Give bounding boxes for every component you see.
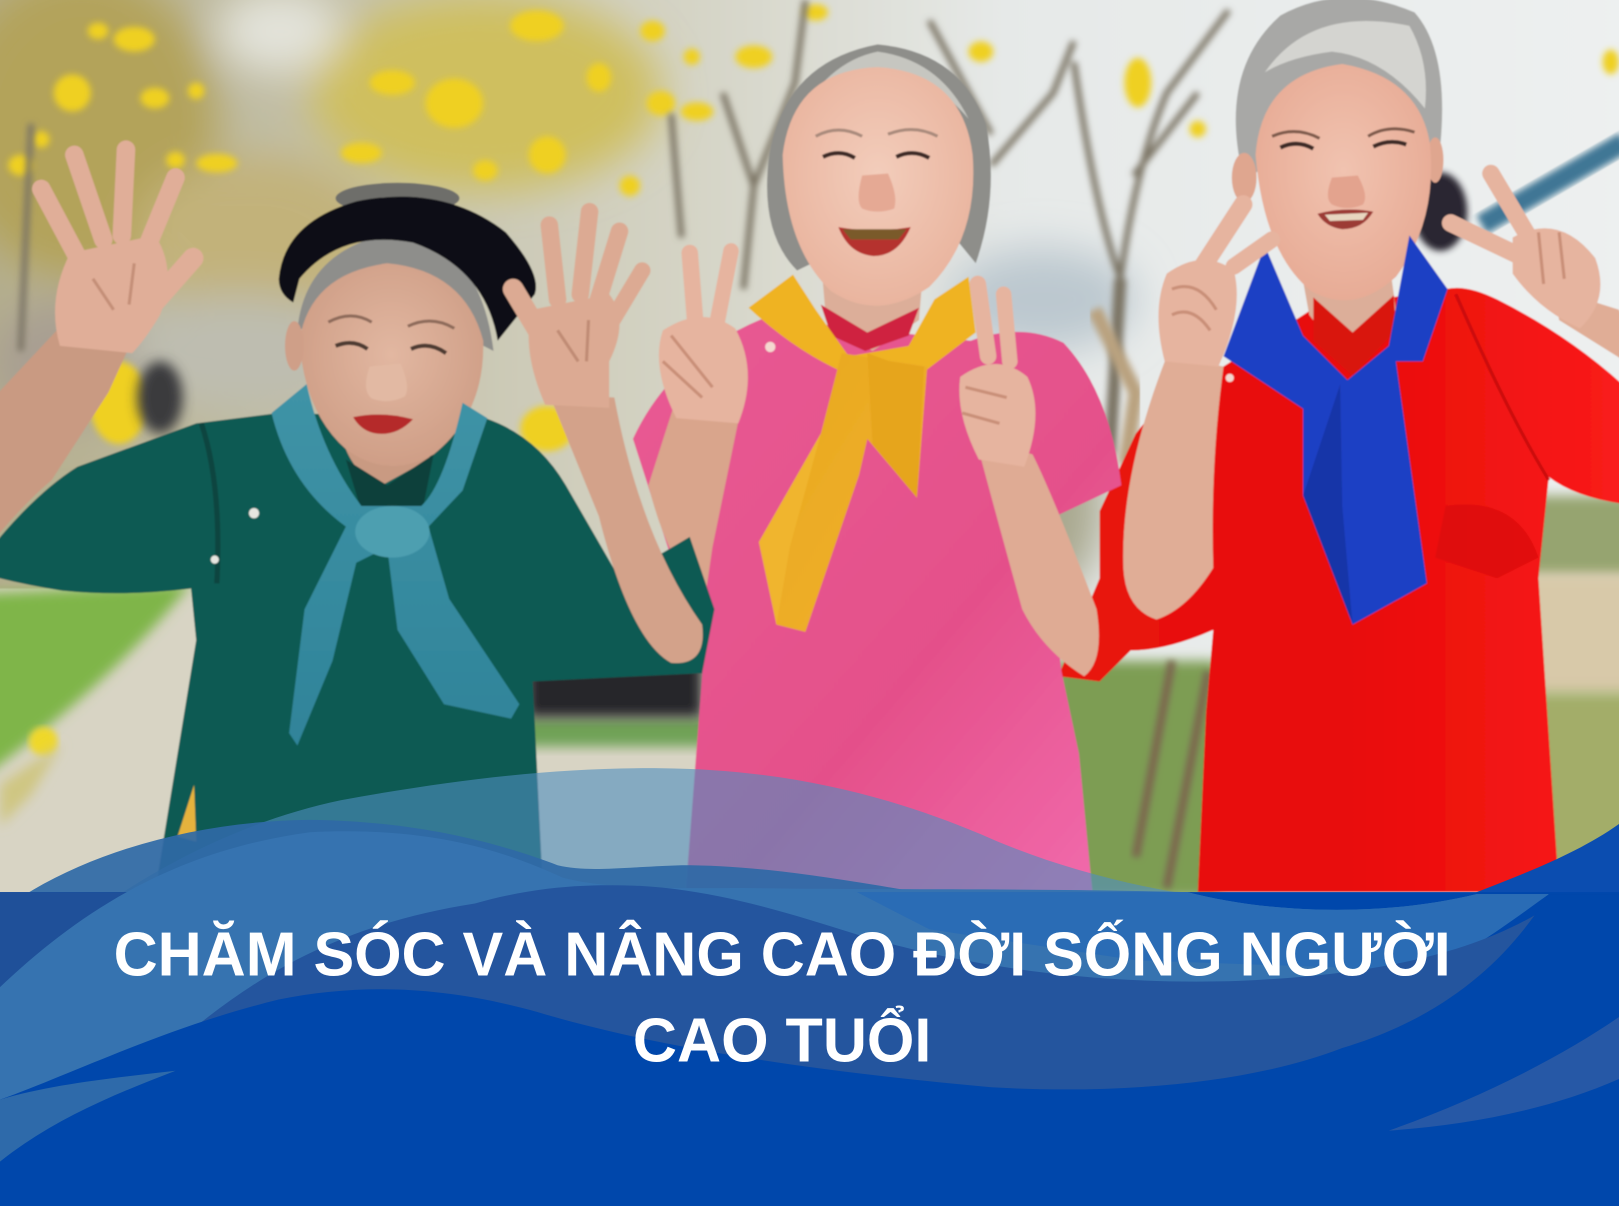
- left raised arm: [0, 330, 134, 558]
- left arm and V-sign hand: [648, 408, 738, 604]
- right arm and V-sign hand: [1554, 289, 1619, 372]
- neck and collar: [1299, 258, 1396, 372]
- blue scarf: [1224, 235, 1448, 625]
- banner: blue wave background: [0, 831, 1619, 1206]
- wave: medium crest over the photo: [26, 820, 929, 894]
- black hat: [279, 197, 536, 341]
- woman in green ao dai with teal scarf and black hat: [0, 150, 715, 892]
- woman in red ao dai with blue scarf: [1058, 0, 1619, 892]
- deep blue lower wave: [0, 894, 1619, 1206]
- light blue band: [0, 831, 1549, 1162]
- right raised hand: [513, 212, 642, 408]
- left arm and V-sign hand: [1123, 356, 1224, 620]
- photo background: flowering trees and park: [0, 0, 1619, 898]
- green dress: [0, 413, 715, 892]
- right lower wave sliver: [1389, 1017, 1619, 1131]
- dress buttons: [211, 508, 259, 564]
- silver hair: [1236, 0, 1442, 181]
- wave: translucent light crest over the photo: [0, 768, 1187, 991]
- wave: deep blue crest top right over the photo: [1471, 824, 1619, 894]
- left raised hand: [41, 150, 193, 353]
- woman in pink ao dai with yellow scarf: [633, 44, 1121, 892]
- ears: [1232, 137, 1443, 202]
- red dress: [1058, 288, 1619, 892]
- face: [1256, 64, 1431, 300]
- photo: three elderly women in ao dai waving: [0, 0, 1619, 898]
- left lower wave sliver: [0, 1071, 176, 1162]
- yellow scarf: [749, 275, 976, 374]
- pink dress: [633, 318, 1121, 892]
- neck: [341, 434, 439, 485]
- face: [783, 67, 973, 306]
- dark mid wave: [191, 885, 1549, 1115]
- face: [299, 263, 483, 466]
- grey hair under hat: [297, 232, 494, 351]
- title: CAO TUỔI: [633, 1005, 931, 1075]
- hair tuft above hat: [336, 183, 459, 214]
- hair: [767, 44, 991, 271]
- right raised arm: [549, 394, 703, 663]
- title: CHĂM SÓC VÀ NÂNG CAO ĐỜI SỐNG NGƯỜI: [114, 921, 1451, 990]
- right arm and V-sign hand: [976, 439, 1099, 676]
- teal scarf: [272, 384, 519, 745]
- title: [114, 921, 1451, 1075]
- neck and collar: [821, 258, 924, 351]
